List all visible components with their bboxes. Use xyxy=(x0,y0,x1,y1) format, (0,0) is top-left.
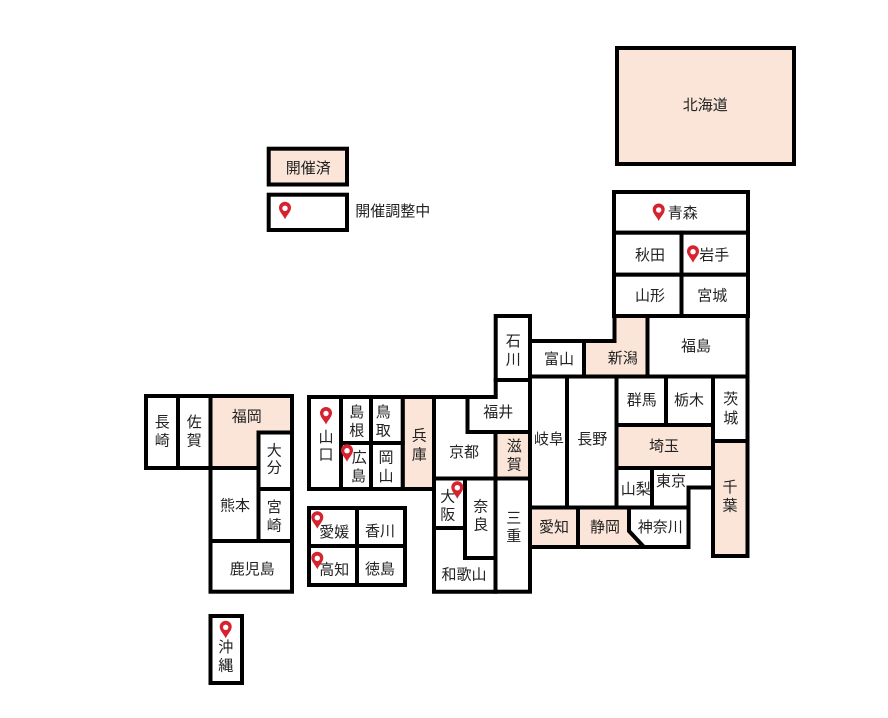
cell: 奈良: 良 xyxy=(473,516,488,534)
cell: 愛媛: 愛媛 xyxy=(319,524,349,541)
cell: 山口: 山 xyxy=(318,429,334,446)
cell: 山梨 xyxy=(616,468,652,508)
cell: 島根: 根 xyxy=(349,422,364,440)
cell: 茨城: 茨 xyxy=(723,391,738,408)
cell: 千葉: 葉 xyxy=(722,498,738,514)
cell: 宮崎: 崎 xyxy=(267,518,282,534)
cell: 高知: 高知 xyxy=(319,562,349,578)
cell: 島根 xyxy=(341,397,371,443)
cell: 富山 xyxy=(530,341,584,376)
cell: 山口: 口 xyxy=(318,446,334,464)
cell: 三重: 三 xyxy=(506,510,521,527)
cell: 新潟: 新潟 xyxy=(608,350,638,367)
cell: 北海道 xyxy=(617,48,794,164)
cell: 和歌山: 和歌山 xyxy=(441,566,487,584)
cell: 鹿児島 xyxy=(210,541,292,592)
cell: 大分: 分 xyxy=(267,460,282,476)
cell: 埼玉 xyxy=(616,425,713,468)
cell: 岐阜: 岐阜 xyxy=(534,431,564,448)
legend: 開催調整中 xyxy=(269,195,430,230)
cell: 長崎 xyxy=(146,396,178,468)
legend: 開催調整中: 開催調整中 xyxy=(355,203,430,220)
cell: 静岡: 静岡 xyxy=(590,519,620,536)
cell: 大阪: 大 xyxy=(440,488,455,506)
cell: 福岡: 福岡 xyxy=(232,408,262,426)
cell: 群馬: 群馬 xyxy=(627,392,657,409)
cell: 岐阜 xyxy=(530,376,567,508)
cell: 鳥取 xyxy=(371,397,403,443)
cell: 三重 xyxy=(496,478,530,592)
cell: 千葉: 千 xyxy=(722,479,738,496)
cell: 岩手: 岩手 xyxy=(699,247,729,264)
cell: 沖縄: 沖 xyxy=(218,639,233,656)
cell: 長野: 長野 xyxy=(577,431,607,448)
cell: 群馬 xyxy=(616,376,666,425)
cell: 兵庫 xyxy=(403,397,434,489)
cell: 京都: 京都 xyxy=(449,444,479,461)
cell: 愛知: 愛知 xyxy=(539,519,569,536)
cell: 福井: 福井 xyxy=(483,404,513,421)
cell: 埼玉: 埼玉 xyxy=(649,438,679,455)
cell: 大分: 大 xyxy=(267,442,282,460)
cell: 奈良: 奈 xyxy=(473,498,488,516)
cell: 沖縄 xyxy=(210,616,242,683)
cell: 千葉 xyxy=(713,441,748,556)
cell: 広島: 広 xyxy=(352,450,367,466)
cell: 佐賀 xyxy=(178,396,210,468)
cell: 和歌山 xyxy=(434,528,496,592)
cell: 東京: 東京 xyxy=(656,473,686,490)
cell: 石川 xyxy=(496,316,530,380)
cell: 京都 xyxy=(434,397,496,478)
cell: 熊本: 熊本 xyxy=(220,498,250,514)
cell: 香川: 香川 xyxy=(365,523,395,540)
cell: 岩手 xyxy=(682,233,748,275)
cell: 岡山: 岡 xyxy=(378,450,394,466)
cell: 静岡 xyxy=(578,508,644,547)
cell: 福岡 xyxy=(210,396,292,468)
cell: 鳥取: 取 xyxy=(376,422,391,440)
cell: 秋田: 秋田 xyxy=(635,247,665,264)
cell: 山口 xyxy=(309,397,341,489)
cell: 島根: 島 xyxy=(349,404,364,421)
cell: 石川: 石 xyxy=(506,333,521,350)
cell: 岡山: 山 xyxy=(378,468,394,485)
cell: 沖縄: 縄 xyxy=(218,658,233,674)
cell: 滋賀 xyxy=(496,432,530,478)
cell: 愛媛 xyxy=(309,508,357,546)
cell: 新潟 xyxy=(584,316,648,376)
cell: 北海道: 北海道 xyxy=(683,97,728,114)
legend: 開催済 xyxy=(269,149,347,184)
cell: 宮崎 xyxy=(258,489,292,541)
cell: 茨城 xyxy=(713,376,748,441)
cell: 奈良 xyxy=(465,478,496,558)
cell: 愛知 xyxy=(530,508,578,547)
cell: 高知 xyxy=(309,546,357,585)
cell: 広島: 島 xyxy=(351,468,366,485)
cell: 青森 xyxy=(614,192,748,233)
cell: 滋賀: 賀 xyxy=(507,456,522,474)
cell: 鳥取: 鳥 xyxy=(376,403,391,421)
cell: 栃木 xyxy=(666,376,713,425)
cell: 富山: 富山 xyxy=(544,351,574,368)
cell: 大分 xyxy=(258,432,292,489)
cell: 茨城: 城 xyxy=(723,410,738,427)
cell: 徳島 xyxy=(357,546,405,585)
cell: 熊本 xyxy=(210,468,258,541)
cell: 神奈川: 神奈川 xyxy=(638,519,683,536)
cell: 広島 xyxy=(341,443,371,489)
cell: 長崎: 長 xyxy=(155,414,170,431)
cell: 滋賀: 滋 xyxy=(507,438,522,455)
cell: 石川: 川 xyxy=(506,352,521,368)
cell: 福島 xyxy=(648,316,748,376)
cell: 徳島: 徳島 xyxy=(365,561,395,578)
cell: 大阪 xyxy=(434,478,465,528)
cell: 岡山 xyxy=(371,443,403,489)
cell: 山形: 山形 xyxy=(635,288,665,304)
cell: 佐賀: 佐 xyxy=(187,414,202,431)
cell: 栃木: 栃木 xyxy=(674,392,704,409)
cell: 福島: 福島 xyxy=(681,338,711,355)
cell: 香川 xyxy=(357,508,405,546)
cell: 兵庫: 兵 xyxy=(412,428,427,444)
cell: 三重: 重 xyxy=(506,528,521,545)
cell: 福井 xyxy=(468,380,530,432)
cell: 宮城 xyxy=(682,275,748,316)
cell: 山梨: 山梨 xyxy=(621,481,651,498)
cell: 大阪: 阪 xyxy=(440,506,455,524)
cell: 山形 xyxy=(614,275,682,316)
cell: 秋田 xyxy=(614,233,682,275)
cell: 鹿児島: 鹿児島 xyxy=(230,561,275,578)
cell: 宮崎: 宮 xyxy=(267,499,282,516)
legend: 開催済: 開催済 xyxy=(286,160,331,177)
cell: 青森: 青森 xyxy=(668,205,698,222)
cell: 長崎: 崎 xyxy=(155,432,170,450)
cell: 宮城: 宮城 xyxy=(697,288,727,304)
cell: 神奈川 xyxy=(629,508,688,547)
cell: 東京 xyxy=(652,468,713,508)
cell: 佐賀: 賀 xyxy=(187,432,202,450)
cell: 兵庫: 庫 xyxy=(412,446,427,464)
cell: 長野 xyxy=(567,376,616,508)
